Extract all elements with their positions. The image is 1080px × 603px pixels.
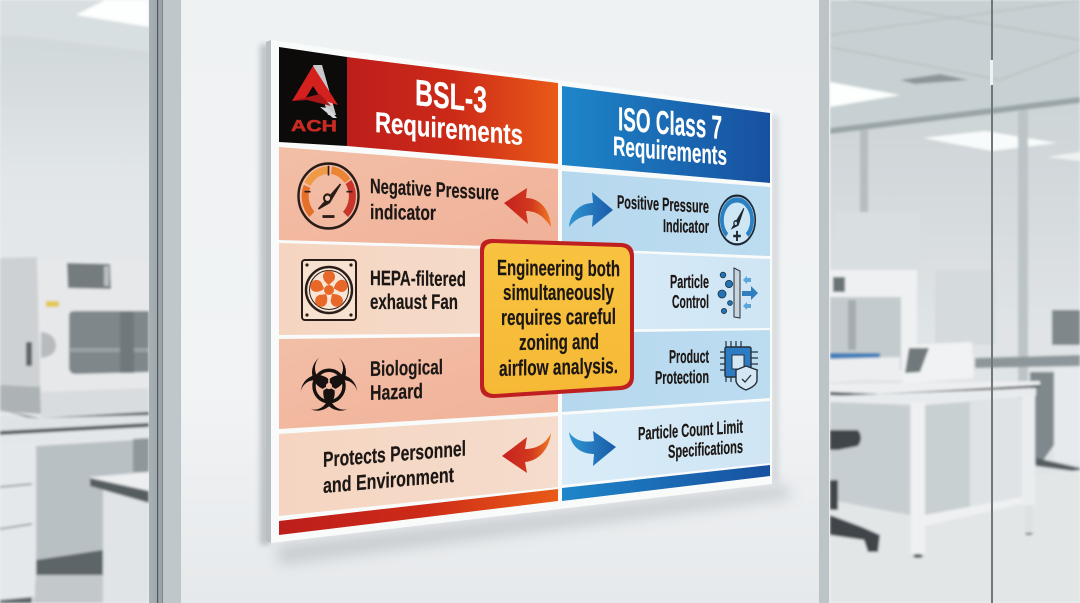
callout: engineering note: zoning and (519, 329, 599, 355)
callout: engineering note (480, 239, 634, 398)
callout: engineering note: simultaneously (503, 280, 615, 305)
arrow: right, bottom (569, 431, 616, 466)
arrow: right, top (569, 192, 613, 227)
icon: exhaust fan (302, 260, 356, 320)
row: particle count limit specifications: Particle Count Limit (638, 416, 743, 444)
lab instrument, left (0, 257, 149, 420)
arrow: left, bottom (502, 433, 551, 473)
panel: ISO Class 7 column (562, 86, 770, 501)
row: positive pressure indicator (562, 171, 770, 256)
footer bar: blue (562, 465, 770, 501)
header: ISO Class 7 Requirements (562, 86, 770, 183)
row: negative pressure indicator: indicator (370, 201, 436, 225)
row: protects personnel and environment (279, 416, 558, 516)
door frame: left (149, 0, 181, 603)
icon: particle filter (718, 268, 758, 318)
background: right lab room (830, 0, 1080, 603)
footer bar: red (279, 489, 558, 535)
row: positive pressure indicator: Indicator (663, 215, 709, 237)
icon: biohazard symbol (300, 357, 358, 411)
panel: BSL-3 column (279, 47, 558, 535)
row: particle control (562, 250, 770, 330)
row: particle control: Control (672, 291, 709, 312)
row: product protection: Protection (655, 366, 709, 388)
callout: engineering note: Engineering both (497, 255, 620, 281)
logo block: ACH (291, 118, 337, 135)
stool (830, 430, 880, 552)
header: ISO Class 7 Requirements: Requirements (613, 131, 727, 171)
row: positive pressure indicator: Positive Pressure (617, 191, 709, 217)
row: negative pressure indicator (279, 147, 558, 248)
row: product protection (562, 330, 770, 412)
sign board (266, 40, 772, 543)
row: biological hazard: Hazard (370, 380, 423, 405)
row: product protection: Product (669, 346, 709, 367)
row: particle control: Particle (670, 271, 709, 292)
lab bench, left (0, 415, 149, 603)
icon: positive pressure gauge (719, 196, 755, 244)
row: biological hazard: Biological (370, 356, 443, 381)
row: particle count limit specifications: Specifications (668, 436, 743, 462)
logo block (279, 47, 347, 146)
callout: engineering note: requires careful (501, 304, 616, 330)
header: BSL-3 Requirements: BSL-3 (415, 71, 487, 121)
header: ISO Class 7 Requirements: ISO Class 7 (618, 101, 722, 147)
door frame: right (819, 0, 993, 603)
board shadow (260, 44, 792, 565)
background: left lab room (0, 0, 150, 603)
wall (181, 0, 821, 603)
row: particle count limit specifications (562, 401, 770, 485)
icon: negative pressure gauge (298, 164, 358, 228)
callout: engineering note: airflow analysis. (499, 353, 618, 381)
icon: chip with shield (720, 341, 758, 390)
row: protects personnel and environment: Protects Personnel (323, 437, 466, 472)
row: biological hazard (279, 336, 558, 432)
row: HEPA-filtered exhaust fan: exhaust Fan (370, 291, 458, 314)
row: HEPA-filtered exhaust fan: HEPA-filtered (370, 267, 466, 291)
row: HEPA-filtered exhaust fan (279, 243, 558, 335)
row: negative pressure indicator: Negative Pressure (370, 175, 499, 205)
header: BSL-3 Requirements: Requirements (375, 107, 523, 152)
arrow: left, top (504, 188, 551, 227)
header: BSL-3 Requirements (347, 57, 558, 164)
row: protects personnel and environment: and Environment (323, 463, 454, 498)
